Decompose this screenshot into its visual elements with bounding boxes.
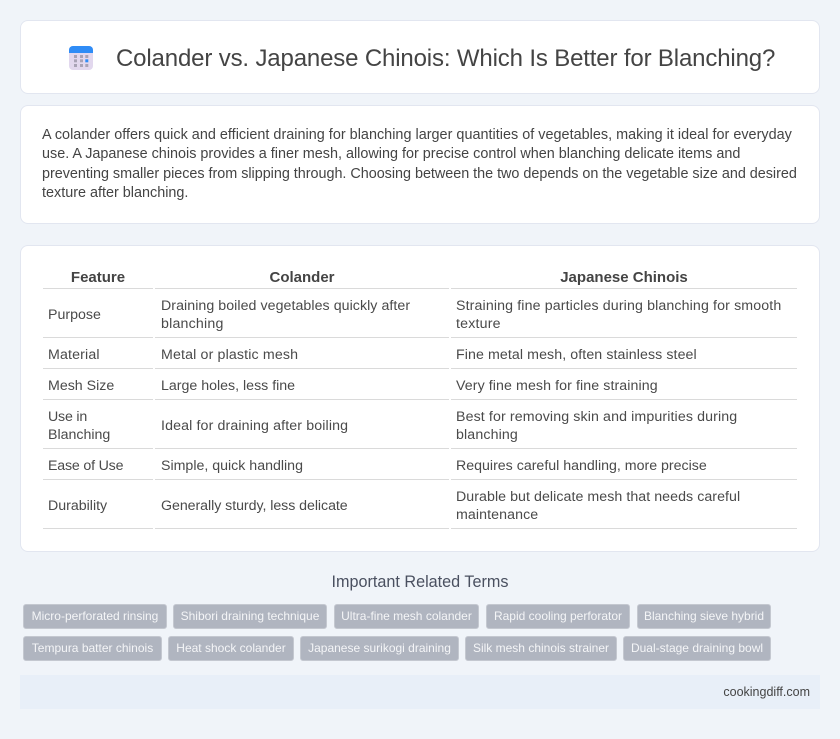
related term tags: Tempura batter chinois — [32, 641, 153, 655]
footer — [20, 675, 820, 709]
comparison table: Use in — [48, 409, 87, 425]
comparison table: Purpose — [48, 307, 101, 323]
related term tags: Blanching sieve hybrid — [644, 609, 764, 623]
footer source text: cookingdiff.com — [723, 685, 810, 699]
comparison table: maintenance — [456, 507, 538, 523]
comparison table: texture — [456, 316, 501, 332]
title: Colander vs. Japanese Chinois: Which Is Better for Blanching? — [116, 45, 775, 72]
comparison table: Japanese Chinois — [560, 269, 688, 286]
comparison table: Simple, quick handling — [161, 458, 303, 474]
comparison table: Best for removing skin and impurities during — [456, 409, 737, 425]
comparison table — [43, 269, 797, 529]
related term tags: Heat shock colander — [176, 641, 286, 655]
related term tags: Dual-stage draining bowl — [631, 641, 763, 655]
comparison table: Mesh Size — [48, 378, 114, 394]
comparison table: Large holes, less fine — [161, 378, 295, 394]
comparison table: Metal or plastic mesh — [161, 347, 298, 363]
comparison table: Ideal for draining after boiling — [161, 418, 348, 434]
comparison table: Material — [48, 347, 100, 363]
related term tags: Japanese surikogi draining — [308, 641, 451, 655]
related term tags: Rapid cooling perforator — [494, 609, 622, 623]
comparison table: Ease of Use — [48, 458, 123, 474]
panel: introduction — [20, 105, 820, 224]
panel: comparison table — [20, 245, 820, 552]
comparison table: Durability — [48, 498, 107, 514]
comparison table: Draining boiled vegetables quickly after — [161, 298, 410, 314]
related term tags — [23, 604, 771, 661]
comparison table: Colander — [269, 269, 334, 286]
comparison table: Feature — [71, 269, 125, 286]
text block: introduction — [42, 127, 797, 201]
panel: header — [20, 20, 820, 94]
related term tags: Ultra-fine mesh colander — [341, 609, 472, 623]
comparison table: Generally sturdy, less delicate — [161, 498, 348, 514]
comparison table: Blanching — [48, 427, 110, 443]
comparison table: Fine metal mesh, often stainless steel — [456, 347, 697, 363]
comparison table: Straining fine particles during blanching for smooth — [456, 298, 781, 314]
related term tags: Micro-perforated rinsing — [32, 609, 158, 623]
comparison table: blanching — [456, 427, 518, 443]
comparison table: Durable but delicate mesh that needs careful — [456, 489, 740, 505]
heading: related terms: Important Related Terms — [332, 573, 508, 591]
comparison table: Very fine mesh for fine straining — [456, 378, 658, 394]
related term tags: Silk mesh chinois strainer — [473, 641, 609, 655]
text block: introduction: texture after blanching. — [42, 185, 188, 201]
text block: introduction: preventing smaller pieces from slipping through. Choosing between the two depends on the vegetable size and desired — [42, 166, 797, 182]
text block: introduction: A colander offers quick and efficient draining for blanching larger quantities of vegetables, making it ideal for everyday — [42, 127, 792, 143]
related term tags: Shibori draining technique — [181, 609, 319, 623]
comparison table: blanching — [161, 316, 224, 332]
icon: calendar — [69, 46, 93, 70]
comparison table: Requires careful handling, more precise — [456, 458, 707, 474]
text block: introduction: use. A Japanese chinois provides a finer mesh, allowing for precise control when blanching delicate items and — [42, 146, 740, 162]
